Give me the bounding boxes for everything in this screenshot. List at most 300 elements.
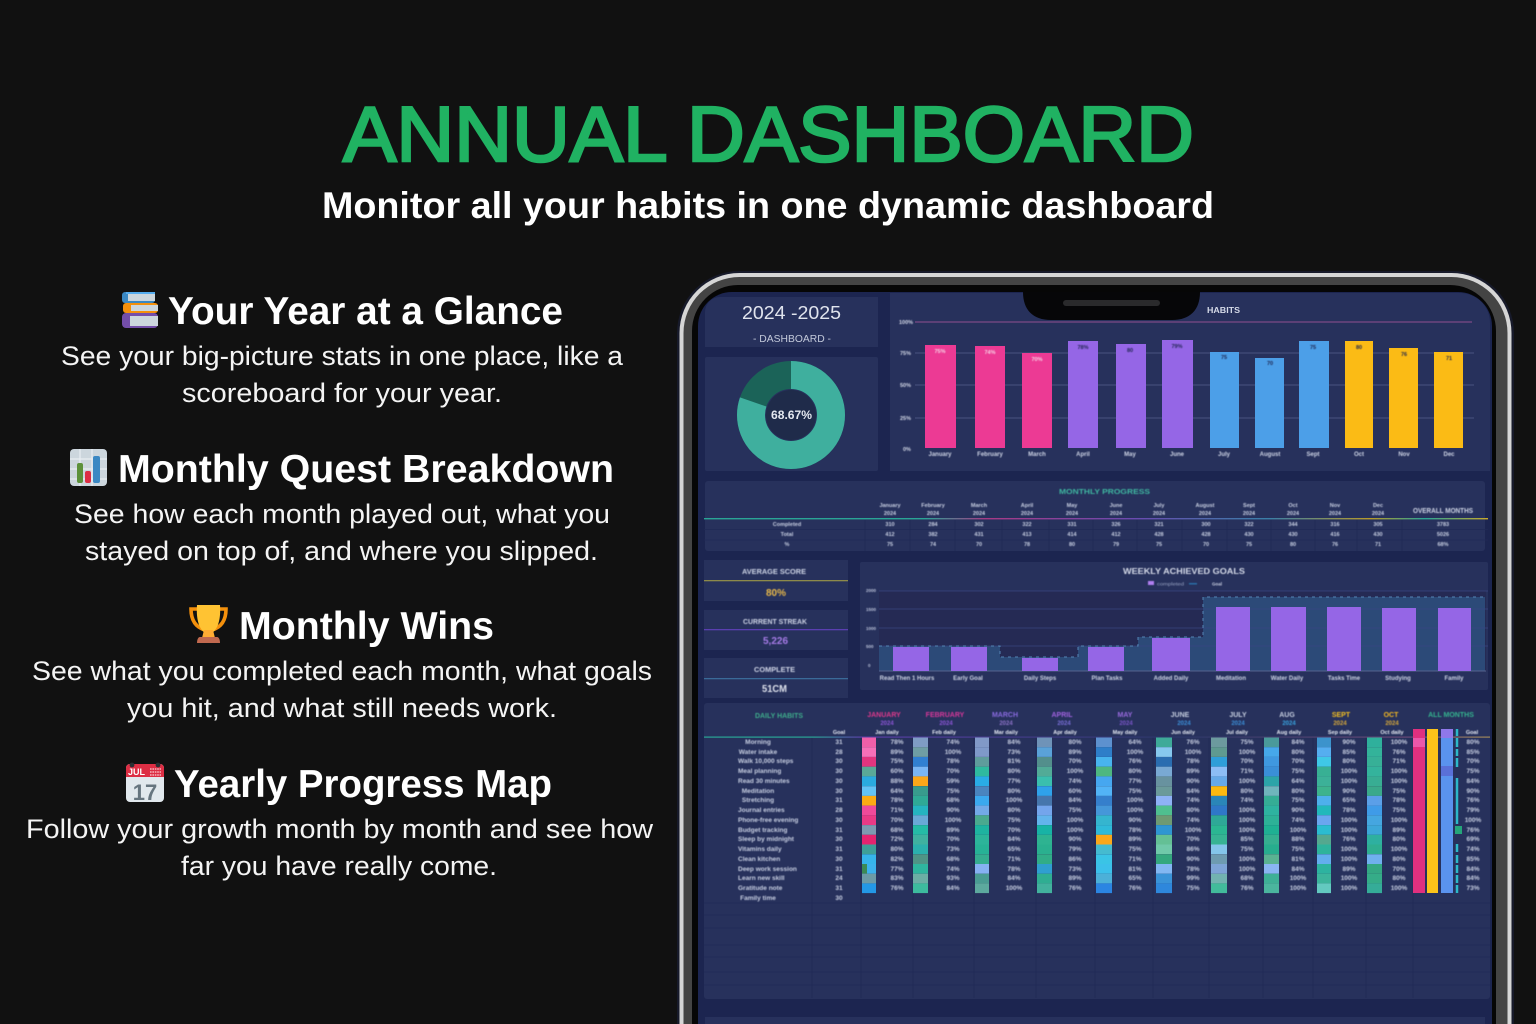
panel: weekly achieved goals chart: Water Daily xyxy=(1271,676,1304,682)
habit names and values: 31 xyxy=(835,797,843,804)
grid header: Jan daily xyxy=(875,730,900,736)
grid header: 2024 xyxy=(1057,721,1071,727)
icon: stack of books xyxy=(122,292,158,328)
habit names and values: 85% xyxy=(1466,749,1480,756)
habit names and values: 100% xyxy=(1391,778,1407,785)
habit names and values: 68% xyxy=(946,856,960,863)
panel: monthly habits bar chart: 70 xyxy=(1267,361,1273,367)
panel: monthly progress table: June xyxy=(1110,503,1122,509)
habit names and values: 64% xyxy=(890,788,904,795)
panel: donut chart: 68.67% xyxy=(771,410,812,422)
panel: monthly habits bar chart: 50% xyxy=(900,383,911,389)
habit names and values: 75% xyxy=(1240,846,1254,853)
panel: weekly achieved goals chart: 1000 xyxy=(866,626,877,631)
grid header: SEPT xyxy=(1332,712,1351,719)
grid header: ALL MONTHS xyxy=(1428,712,1474,719)
panel: monthly progress table: % xyxy=(785,542,789,548)
habit names and values: Deep work session xyxy=(738,866,797,873)
habit names and values: 84% xyxy=(1007,739,1020,746)
body text: See how each month played out, what you xyxy=(74,499,610,529)
body text: you hit, and what still needs work. xyxy=(127,693,557,723)
panel: KPI cards xyxy=(704,560,848,698)
grid header: Goal xyxy=(833,730,846,736)
habit names and values: 90% xyxy=(1291,807,1304,814)
habit names and values: 74% xyxy=(946,866,960,873)
heading: Yearly Progress Map xyxy=(174,763,552,806)
habit names and values: 100% xyxy=(1239,856,1255,863)
habit names and values: 100% xyxy=(1341,885,1357,892)
habit names and values: 86% xyxy=(1068,856,1082,863)
panel: monthly habits bar chart: 79% xyxy=(1171,344,1183,350)
grid header: 2024 xyxy=(1282,721,1296,727)
panel: monthly progress table: 79 xyxy=(1113,542,1119,548)
card: current streak: CURRENT STREAK xyxy=(743,617,808,626)
habit names and values: 70% xyxy=(1068,758,1082,765)
grid header: OCT xyxy=(1384,712,1399,719)
panel: monthly progress table: 331 xyxy=(1067,522,1077,528)
habit names and values: 83% xyxy=(890,875,904,882)
panel: monthly progress table: 3783 xyxy=(1437,522,1449,528)
habit names and values: 90% xyxy=(1342,788,1356,795)
habit names and values: 100% xyxy=(1341,875,1357,882)
panel: year title: - DASHBOARD - xyxy=(753,334,831,345)
habit names and values: 31 xyxy=(835,739,843,746)
habit names and values: 75% xyxy=(1128,846,1142,853)
panel: monthly progress table: 300 xyxy=(1201,522,1211,528)
panel: monthly progress table: 321 xyxy=(1154,522,1164,528)
habit names and values: 90% xyxy=(1128,817,1142,824)
habit names and values: 74% xyxy=(946,739,960,746)
icon: calendar: JUL xyxy=(128,767,146,777)
habit names and values: 90% xyxy=(946,807,960,814)
panel: monthly habits bar chart: March xyxy=(1028,452,1046,458)
panel: monthly habits bar chart: 75% xyxy=(900,351,911,357)
panel: weekly achieved goals chart: Read Then 1 Hours xyxy=(880,676,935,682)
grid header: JANUARY xyxy=(867,712,901,719)
panel: monthly progress table: 78 xyxy=(1024,542,1030,548)
title: ANNUAL DASHBOARD xyxy=(343,90,1194,178)
panel: monthly progress table: 412 xyxy=(885,532,895,538)
habit names and values: 78% xyxy=(1007,866,1020,873)
panel: monthly habits bar chart: 0% xyxy=(903,447,911,453)
habit names and values: 81% xyxy=(1291,856,1304,863)
habit names and values: 89% xyxy=(1068,875,1082,882)
habit names and values: 28 xyxy=(835,749,843,756)
notch xyxy=(1023,292,1200,320)
habit names and values: 80% xyxy=(1128,768,1142,775)
panel: monthly progress table: 414 xyxy=(1067,532,1077,538)
panel: monthly habits bar chart: 100% xyxy=(899,320,913,326)
habit names and values: 89% xyxy=(1068,749,1082,756)
tablet screen xyxy=(698,292,1492,1024)
habit names and values: Learn new skill xyxy=(738,875,785,882)
panel: monthly progress table: 75 xyxy=(887,542,893,548)
habit names and values: 30 xyxy=(835,768,843,775)
panel: monthly habits bar chart: Oct xyxy=(1354,452,1364,458)
habit names and values: 80% xyxy=(1068,739,1082,746)
panel: monthly progress table: 74 xyxy=(930,542,936,548)
panel: monthly progress table: 428 xyxy=(1154,532,1164,538)
habit names and values: 100% xyxy=(1341,856,1357,863)
habit names and values: 82% xyxy=(890,856,904,863)
habit names and values: 60% xyxy=(1068,788,1082,795)
habit names and values: 100% xyxy=(1127,749,1143,756)
grid header: 2024 xyxy=(1385,721,1399,727)
panel: monthly progress table: 2024 xyxy=(1153,511,1165,517)
panel: weekly achieved goals chart: 0 xyxy=(868,663,871,668)
panel: weekly achieved goals chart: Family xyxy=(1444,676,1464,682)
habit names and values: 65% xyxy=(1128,875,1142,882)
habit names and values: 84% xyxy=(1186,788,1200,795)
body text: Follow your growth month by month and see how xyxy=(26,814,654,844)
panel: monthly progress table: May xyxy=(1067,503,1077,509)
habit names and values: 70% xyxy=(1240,758,1254,765)
panel: monthly progress table: MONTHLY PROGRESS xyxy=(1059,487,1150,496)
habit names and values: 100% xyxy=(1185,749,1201,756)
habit names and values: 100% xyxy=(1239,866,1255,873)
panel: monthly progress table: 2024 xyxy=(927,511,939,517)
panel: monthly progress table: Sept xyxy=(1243,503,1255,509)
habit names and values: 73% xyxy=(1068,866,1082,873)
habit names and values: Journal entries xyxy=(738,807,785,814)
panel: monthly habits bar chart: Nov xyxy=(1398,452,1410,458)
panel: monthly habits bar chart: Dec xyxy=(1443,452,1455,458)
habit names and values: 59% xyxy=(946,778,960,785)
panel: monthly progress table: 430 xyxy=(1244,532,1254,538)
habit names and values: 75% xyxy=(1007,817,1020,824)
panel: weekly achieved goals chart: WEEKLY ACHIEVED GOALS xyxy=(1123,567,1246,576)
habit names and values: 100% xyxy=(1341,846,1357,853)
grid header: DAILY HABITS xyxy=(755,713,803,720)
habit names and values: 75% xyxy=(1240,739,1254,746)
habit names and values: 80% xyxy=(1466,739,1480,746)
habit names and values: 85% xyxy=(1466,856,1480,863)
habit names and values: 72% xyxy=(890,836,904,843)
habit names and values: 84% xyxy=(1466,778,1480,785)
habit names and values: 75% xyxy=(1291,846,1304,853)
panel: monthly progress table: 416 xyxy=(1330,532,1340,538)
panel: next section peek xyxy=(705,1017,1485,1024)
panel: monthly habits bar chart: May xyxy=(1124,452,1136,458)
habit names and values: 75% xyxy=(1466,768,1480,775)
habit names and values: 100% xyxy=(1465,817,1481,824)
card: completion: 51CM xyxy=(762,684,787,695)
habit names and values: 78% xyxy=(890,739,904,746)
habit names and values: 80% xyxy=(1392,875,1406,882)
grid header: May daily xyxy=(1113,730,1138,736)
habit names and values: 70% xyxy=(1466,758,1480,765)
panel: weekly achieved goals chart: 2000 xyxy=(866,588,877,593)
panel: monthly progress table: 76 xyxy=(1332,542,1338,548)
habit names and values: 70% xyxy=(890,817,904,824)
habit names and values: 71% xyxy=(890,807,904,814)
icon: calendar xyxy=(126,763,164,805)
body text: stayed on top of, and where you slipped. xyxy=(85,536,598,566)
habit names and values: 80% xyxy=(1291,749,1304,756)
grid header: 2024 xyxy=(939,721,953,727)
habit names and values xyxy=(704,738,1490,906)
grid header: 2024 xyxy=(999,721,1013,727)
grid header: 2024 xyxy=(1119,721,1133,727)
grid header: APRIL xyxy=(1052,712,1073,719)
body text: far you have really come. xyxy=(181,851,497,881)
icon: calendar: 17 xyxy=(133,780,157,805)
habit names and values: 100% xyxy=(945,749,961,756)
grid header: Jun daily xyxy=(1171,730,1196,736)
panel: monthly habits bar chart: February xyxy=(977,452,1003,458)
grid header: Feb daily xyxy=(932,730,957,736)
habit names and values: Vitamins daily xyxy=(738,846,782,853)
panel: monthly progress table: 382 xyxy=(928,532,938,538)
habit names and values: 75% xyxy=(890,758,904,765)
habit names and values: 78% xyxy=(1392,797,1406,804)
habit names and values: 76% xyxy=(1342,836,1356,843)
panel: weekly achieved goals chart: Tasks Time xyxy=(1328,676,1361,682)
panel: monthly progress table: 2024 xyxy=(1372,511,1384,517)
habit names and values: 100% xyxy=(1067,768,1083,775)
panel: monthly progress table: 2024 xyxy=(884,511,896,517)
panel: monthly progress table: 68% xyxy=(1437,542,1448,548)
habit names and values: 80% xyxy=(890,846,904,853)
panel: monthly habits bar chart: 78% xyxy=(1077,345,1089,351)
card: completion: COMPLETE xyxy=(754,665,795,674)
panel: monthly progress table: January xyxy=(879,503,901,509)
grid header: 2024 xyxy=(1177,721,1191,727)
habit names and values: 74% xyxy=(1186,817,1200,824)
habit names and values: 85% xyxy=(1240,836,1254,843)
habit names and values: 76% xyxy=(890,885,904,892)
habit names and values: 80% xyxy=(1392,836,1406,843)
habit names and values: 60% xyxy=(890,768,904,775)
panel: monthly progress table: 71 xyxy=(1375,542,1381,548)
section: your year at a glance xyxy=(61,290,624,408)
habit names and values: 89% xyxy=(890,749,904,756)
habit names and values: 100% xyxy=(1290,827,1306,834)
grid header: Jul daily xyxy=(1226,730,1249,736)
grid header: MARCH xyxy=(992,712,1018,719)
habit names and values: 31 xyxy=(835,827,843,834)
habit names and values: 81% xyxy=(1128,866,1142,873)
habit names and values: Clean kitchen xyxy=(738,856,780,863)
grid header: JULY xyxy=(1229,712,1247,719)
panel: monthly habits bar chart: June xyxy=(1170,452,1185,458)
habit names and values: 74% xyxy=(1186,797,1200,804)
panel: year title: 2024 -2025 xyxy=(742,303,841,323)
habit names and values: 31 xyxy=(835,885,843,892)
habit names and values: 100% xyxy=(945,817,961,824)
habit names and values: 73% xyxy=(1007,749,1020,756)
panel: monthly progress table: 284 xyxy=(928,522,938,528)
panel: monthly progress table: 305 xyxy=(1373,522,1383,528)
panel: donut chart xyxy=(705,357,878,471)
habit names and values: 90% xyxy=(1186,778,1200,785)
habit names and values: 70% xyxy=(1007,827,1020,834)
panel: monthly habits bar chart: 25% xyxy=(900,416,911,422)
habit names and values: 68% xyxy=(890,827,904,834)
habit names and values: 100% xyxy=(1006,885,1022,892)
grid header: JUNE xyxy=(1171,712,1190,719)
panel: monthly habits bar chart: 75 xyxy=(1310,345,1316,351)
habit names and values: 100% xyxy=(1127,797,1143,804)
card: current streak xyxy=(704,610,848,650)
habit names and values: 100% xyxy=(1341,817,1357,824)
habit names and values: 75% xyxy=(1128,788,1142,795)
habit names and values: 89% xyxy=(1186,768,1200,775)
habit names and values: 89% xyxy=(1342,866,1356,873)
habit names and values: 30 xyxy=(835,856,843,863)
grid header: 2024 xyxy=(1231,721,1245,727)
section: monthly quest breakdown xyxy=(70,448,614,566)
panel: monthly progress table: 316 xyxy=(1330,522,1340,528)
panel: monthly progress table: April xyxy=(1021,503,1033,509)
step area goal xyxy=(879,597,1485,671)
panel: monthly progress table: 413 xyxy=(1022,532,1032,538)
habit names and values: 30 xyxy=(835,895,843,902)
habit names and values: 78% xyxy=(946,758,960,765)
habit names and values: 73% xyxy=(1466,885,1480,892)
habit names and values: 71% xyxy=(1128,856,1142,863)
habit names and values: 84% xyxy=(1291,739,1304,746)
habit names and values: Water intake xyxy=(739,749,777,756)
habit names and values: 70% xyxy=(1291,758,1304,765)
panel: monthly progress table: 80 xyxy=(1290,542,1296,548)
habit names and values: 74% xyxy=(1068,778,1082,785)
section: yearly progress map xyxy=(26,763,654,881)
habit names and values: 70% xyxy=(1392,866,1406,873)
habit names and values: 100% xyxy=(1341,778,1357,785)
panel: monthly progress table: 431 xyxy=(974,532,984,538)
panel: monthly progress table: 2024 xyxy=(1243,511,1255,517)
panel: weekly achieved goals chart: Studying xyxy=(1385,676,1411,682)
panel: monthly habits bar chart: Sept xyxy=(1306,452,1320,458)
panel: monthly progress table: 70 xyxy=(976,542,982,548)
panel: monthly progress table: 75 xyxy=(1246,542,1252,548)
habit names and values: 75% xyxy=(1392,807,1406,814)
panel: monthly progress table: 322 xyxy=(1244,522,1254,528)
card: average score: 80% xyxy=(766,588,786,599)
habit names and values: 100% xyxy=(1239,749,1255,756)
panel: monthly progress table: 326 xyxy=(1111,522,1121,528)
heading: Monthly Wins xyxy=(239,605,494,648)
habit names and values: Gratitude note xyxy=(738,885,782,892)
habit names and values: Phone-free evening xyxy=(738,817,798,824)
panel: monthly progress table: 310 xyxy=(885,522,895,528)
icon: trophy xyxy=(191,605,226,643)
panel: weekly achieved goals chart: Added Daily xyxy=(1154,676,1189,682)
panel: monthly progress table: Oct xyxy=(1288,503,1298,509)
habit names and values: 68% xyxy=(1240,875,1254,882)
habit names and values: 84% xyxy=(1466,875,1480,882)
habit names and values: 78% xyxy=(1186,758,1200,765)
habit names and values: 100% xyxy=(1067,827,1083,834)
habit names and values: 79% xyxy=(1466,807,1480,814)
habit names and values: 81% xyxy=(1007,758,1020,765)
panel: monthly progress table: 412 xyxy=(1111,532,1121,538)
grid header: AUG xyxy=(1279,712,1295,719)
habit names and values: 100% xyxy=(1067,817,1083,824)
habit names and values: 84% xyxy=(1007,836,1020,843)
panel: monthly habits bar chart: 76 xyxy=(1401,352,1407,358)
habit names and values: 100% xyxy=(1239,827,1255,834)
habit names and values: 30 xyxy=(835,758,843,765)
habit names and values: 90% xyxy=(1186,856,1200,863)
habit names and values: 71% xyxy=(1007,856,1020,863)
body text: See your big-picture stats in one place, like a xyxy=(61,341,624,371)
panel: monthly progress table: 2024 xyxy=(973,511,985,517)
habit names and values: 80% xyxy=(1342,758,1356,765)
section: monthly wins xyxy=(32,605,652,723)
legend xyxy=(1148,581,1222,586)
habit names and values: 65% xyxy=(1007,846,1020,853)
habit names and values: 76% xyxy=(1186,739,1200,746)
habit names and values: 100% xyxy=(1341,827,1357,834)
grid header: Mar daily xyxy=(994,730,1019,736)
habit names and values: 77% xyxy=(1007,778,1020,785)
habit names and values: 75% xyxy=(946,788,960,795)
habit names and values: 99% xyxy=(1186,875,1200,882)
icon: bar chart xyxy=(70,449,107,486)
habit names and values: 64% xyxy=(1291,778,1304,785)
habit names and values: 68% xyxy=(946,797,960,804)
habit names and values: 78% xyxy=(890,797,904,804)
subtitle: Monitor all your habits in one dynamic dashboard xyxy=(322,185,1214,226)
habit names and values: 78% xyxy=(1186,866,1200,873)
habit names and values: 100% xyxy=(1239,807,1255,814)
grid header xyxy=(755,712,1479,736)
panel: monthly progress table: Nov xyxy=(1330,503,1340,509)
habit names and values: 80% xyxy=(1291,788,1304,795)
card: completion xyxy=(704,658,848,698)
habit names and values: 76% xyxy=(1466,827,1480,834)
habit names and values: Read 30 minutes xyxy=(738,778,790,785)
habit names and values: 76% xyxy=(1068,885,1082,892)
panel: monthly progress table: 302 xyxy=(974,522,984,528)
panel: monthly habits bar chart: 80 xyxy=(1356,345,1362,351)
habit names and values: 100% xyxy=(1391,885,1407,892)
habit names and values: 74% xyxy=(1466,846,1480,853)
panel: monthly habits bar chart: 71 xyxy=(1446,356,1452,362)
habit names and values: 89% xyxy=(1128,836,1142,843)
habit names and values: 31 xyxy=(835,866,843,873)
habit names and values: 90% xyxy=(1068,836,1082,843)
tablet frame xyxy=(677,271,1514,1024)
habit names and values: 80% xyxy=(1007,768,1020,775)
panel: monthly habits bar chart: 70% xyxy=(1031,357,1043,363)
panel: monthly progress table: 2024 xyxy=(1066,511,1078,517)
panel: monthly progress table: 2024 xyxy=(1287,511,1299,517)
habit names and values: 88% xyxy=(1291,836,1304,843)
panel: monthly progress table: 75 xyxy=(1156,542,1162,548)
habit names and values: 84% xyxy=(1466,866,1480,873)
habit names and values: 78% xyxy=(1342,807,1356,814)
panel: weekly achieved goals chart: Meditation xyxy=(1216,676,1246,682)
panel: monthly progress table: Completed xyxy=(773,522,801,528)
panel: year title xyxy=(705,297,878,347)
panel: monthly progress table: 322 xyxy=(1022,522,1032,528)
habit names and values: 70% xyxy=(1186,836,1200,843)
habit names and values: Meal planning xyxy=(738,768,781,775)
panel: habit tracker grid xyxy=(704,703,1490,999)
habit names and values: 69% xyxy=(1466,836,1480,843)
panel: monthly progress table: 2024 xyxy=(1199,511,1211,517)
habit names and values: 100% xyxy=(1391,846,1407,853)
panel: monthly habits bar chart: April xyxy=(1076,452,1090,458)
panel: monthly progress table: Dec xyxy=(1373,503,1383,509)
panel: weekly achieved goals chart: 1500 xyxy=(866,607,877,612)
panel: monthly progress table: 344 xyxy=(1288,522,1298,528)
habit names and values: 65% xyxy=(1342,797,1356,804)
body text: scoreboard for your year. xyxy=(182,378,502,408)
